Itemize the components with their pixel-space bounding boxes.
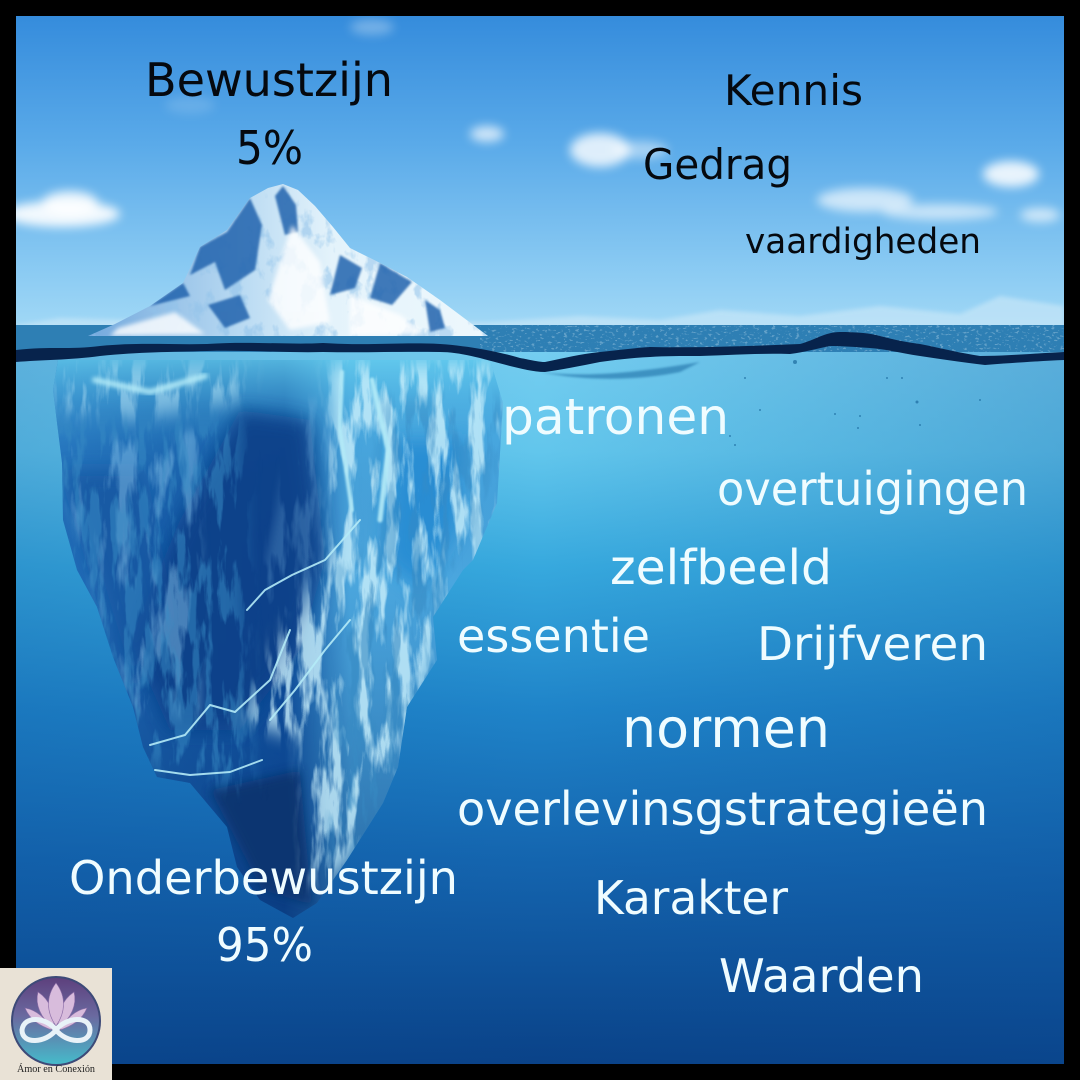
bubbles [729,360,981,446]
label: overlevinsgstrategieën: overlevinsgstrategieën [457,782,988,836]
label: Kennis: Kennis [724,66,863,115]
sky [16,16,1064,336]
iceberg below water [40,355,510,925]
label: normen: normen [622,697,830,760]
text below water [69,388,1028,1003]
label: essentie: essentie [457,609,650,663]
label: Bewustzijn 5% [145,53,393,175]
iceberg above water [80,180,500,340]
ice texture [66,400,334,720]
text above water [145,53,981,262]
dark core [130,410,325,730]
iceberg shadows [150,186,445,332]
logo text: Ámor en Conexión [17,1063,95,1075]
icon: infinity symbol [22,1019,90,1041]
label: Onderbewustzijn 95%: Onderbewustzijn [69,851,458,905]
sea [16,352,1064,1064]
water line [16,332,1064,379]
label: Onderbewustzijn 95%: 95% [216,918,313,972]
label: Gedrag: Gedrag [643,140,792,189]
label: Onderbewustzijn 95% [72,858,454,962]
label: zelfbeeld: zelfbeeld [610,540,832,596]
label: vaardigheden: vaardigheden [745,222,981,262]
label: Bewustzijn 5%: 5% [236,121,303,175]
label: Drijfveren: Drijfveren [757,617,988,671]
label: Bewustzijn 5%: Bewustzijn [145,53,393,107]
icon: lotus [25,983,87,1030]
label: overtuigingen: overtuigingen [717,462,1028,516]
clouds [4,19,1060,227]
logo: Amor en Conexión [0,968,112,1080]
label: patronen: patronen [502,388,729,446]
light veins [95,372,388,775]
label: Karakter: Karakter [594,871,788,925]
sea shading [16,352,1064,812]
label: Waarden: Waarden [719,949,924,1003]
distant horizon [16,296,1064,357]
